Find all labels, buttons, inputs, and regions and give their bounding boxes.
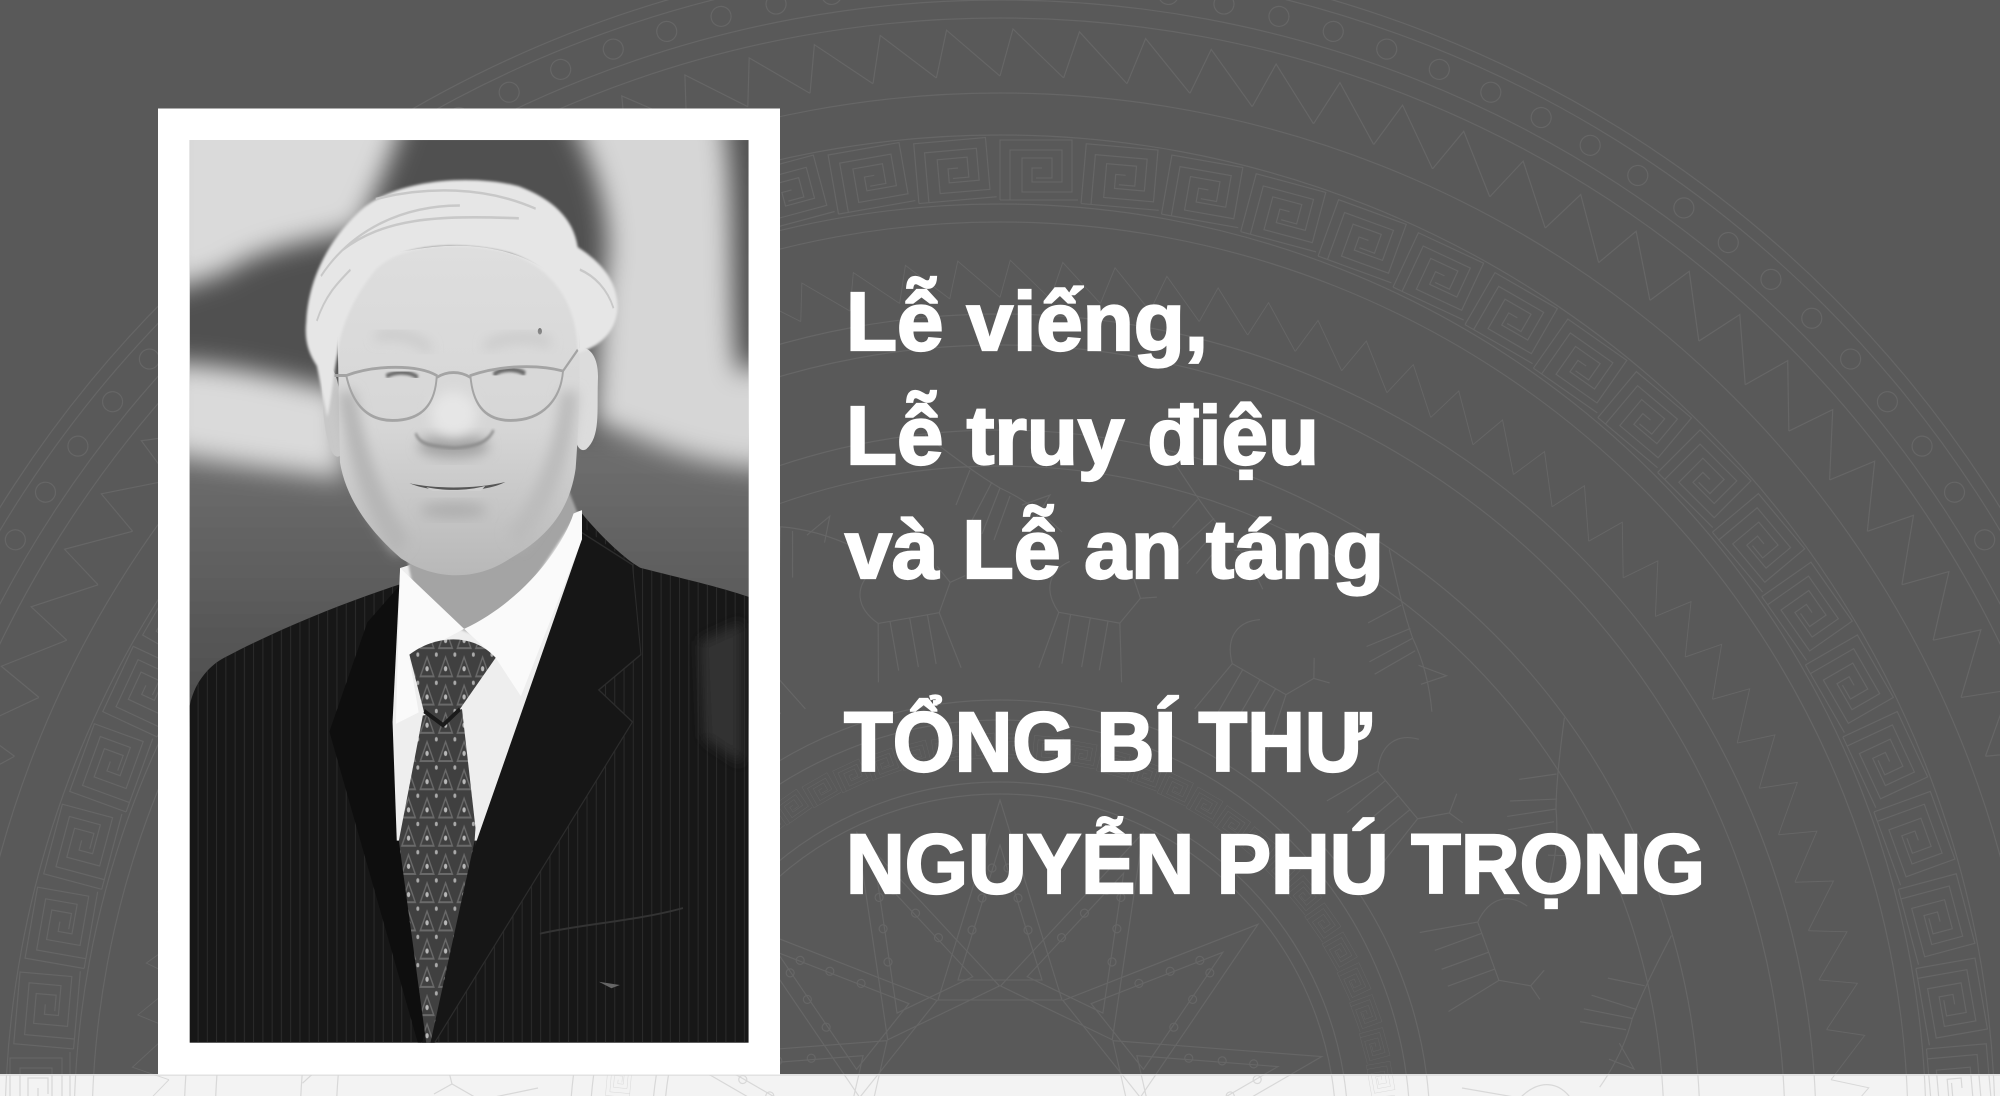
shirt and collar	[393, 481, 582, 841]
ears	[321, 348, 598, 457]
eyeglasses	[334, 350, 578, 420]
photo background	[190, 140, 749, 1043]
line 2: Lễ truy điệu	[846, 389, 1319, 482]
white photo frame	[158, 108, 780, 1074]
position line: TỔNG BÍ THƯ	[844, 695, 1371, 789]
hair	[306, 180, 618, 417]
suit jacket	[190, 513, 749, 1043]
heading: name and position	[844, 695, 1705, 911]
line 3: và Lễ an táng	[845, 503, 1384, 596]
bottom light strip	[0, 1074, 2000, 1096]
heading: ceremony title	[845, 275, 1384, 596]
face	[338, 246, 580, 575]
necktie	[399, 639, 496, 1043]
name line: NGUYỄN PHÚ TRỌNG	[846, 817, 1705, 911]
portrait photo	[190, 140, 749, 1043]
line 1: Lễ viếng,	[846, 275, 1208, 368]
